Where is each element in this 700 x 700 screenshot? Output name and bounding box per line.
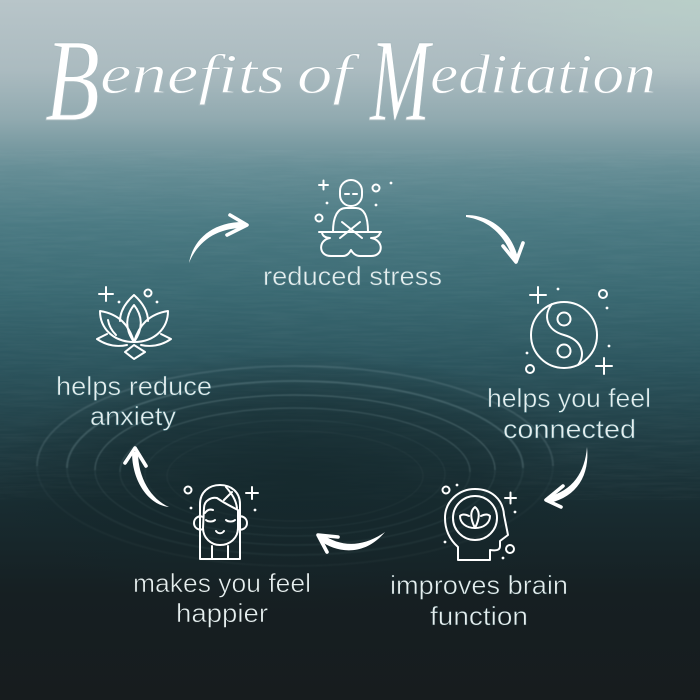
title: editation — [430, 44, 656, 106]
arrow: anxiety to stress — [189, 215, 247, 263]
arrow: brain to happier — [318, 532, 385, 552]
step: improves brain function — [390, 484, 568, 631]
icon: lotus flower — [97, 287, 171, 359]
label: improves brain function — [390, 570, 568, 631]
step: makes you feel happier — [133, 485, 311, 628]
title: enefits — [100, 44, 285, 106]
label: helps you feel connected — [487, 383, 651, 444]
title: B — [45, 15, 100, 146]
label: helps reduce anxiety — [56, 371, 212, 431]
arrow: connected to brain — [546, 447, 587, 507]
arrow: stress to connected — [466, 215, 523, 262]
title — [45, 15, 656, 146]
label: reduced stress: reduced stress — [263, 261, 442, 291]
icon: meditating figure — [316, 180, 392, 256]
label: improves brain function: function — [430, 601, 528, 631]
title: M — [369, 15, 433, 146]
water ripples — [37, 366, 553, 566]
icon: yin yang — [526, 287, 612, 374]
label: makes you feel happier: makes you feel — [133, 568, 311, 598]
label: helps reduce anxiety: anxiety — [90, 401, 176, 431]
label: helps you feel connected: helps you feel — [487, 383, 651, 413]
icon: smiling face — [184, 485, 258, 559]
label: makes you feel happier: happier — [176, 598, 268, 628]
step: helps reduce anxiety — [56, 287, 212, 431]
label: improves brain function: improves brain — [390, 570, 568, 600]
label: helps reduce anxiety: helps reduce — [56, 371, 212, 401]
label: makes you feel happier — [133, 568, 311, 628]
label: helps you feel connected: connected — [503, 414, 636, 444]
icon: head with lotus — [442, 484, 516, 560]
step: reduced stress — [263, 180, 442, 291]
title: of — [297, 44, 361, 106]
step: helps you feel connected — [487, 287, 651, 444]
arrow: happier to anxiety — [125, 448, 169, 507]
